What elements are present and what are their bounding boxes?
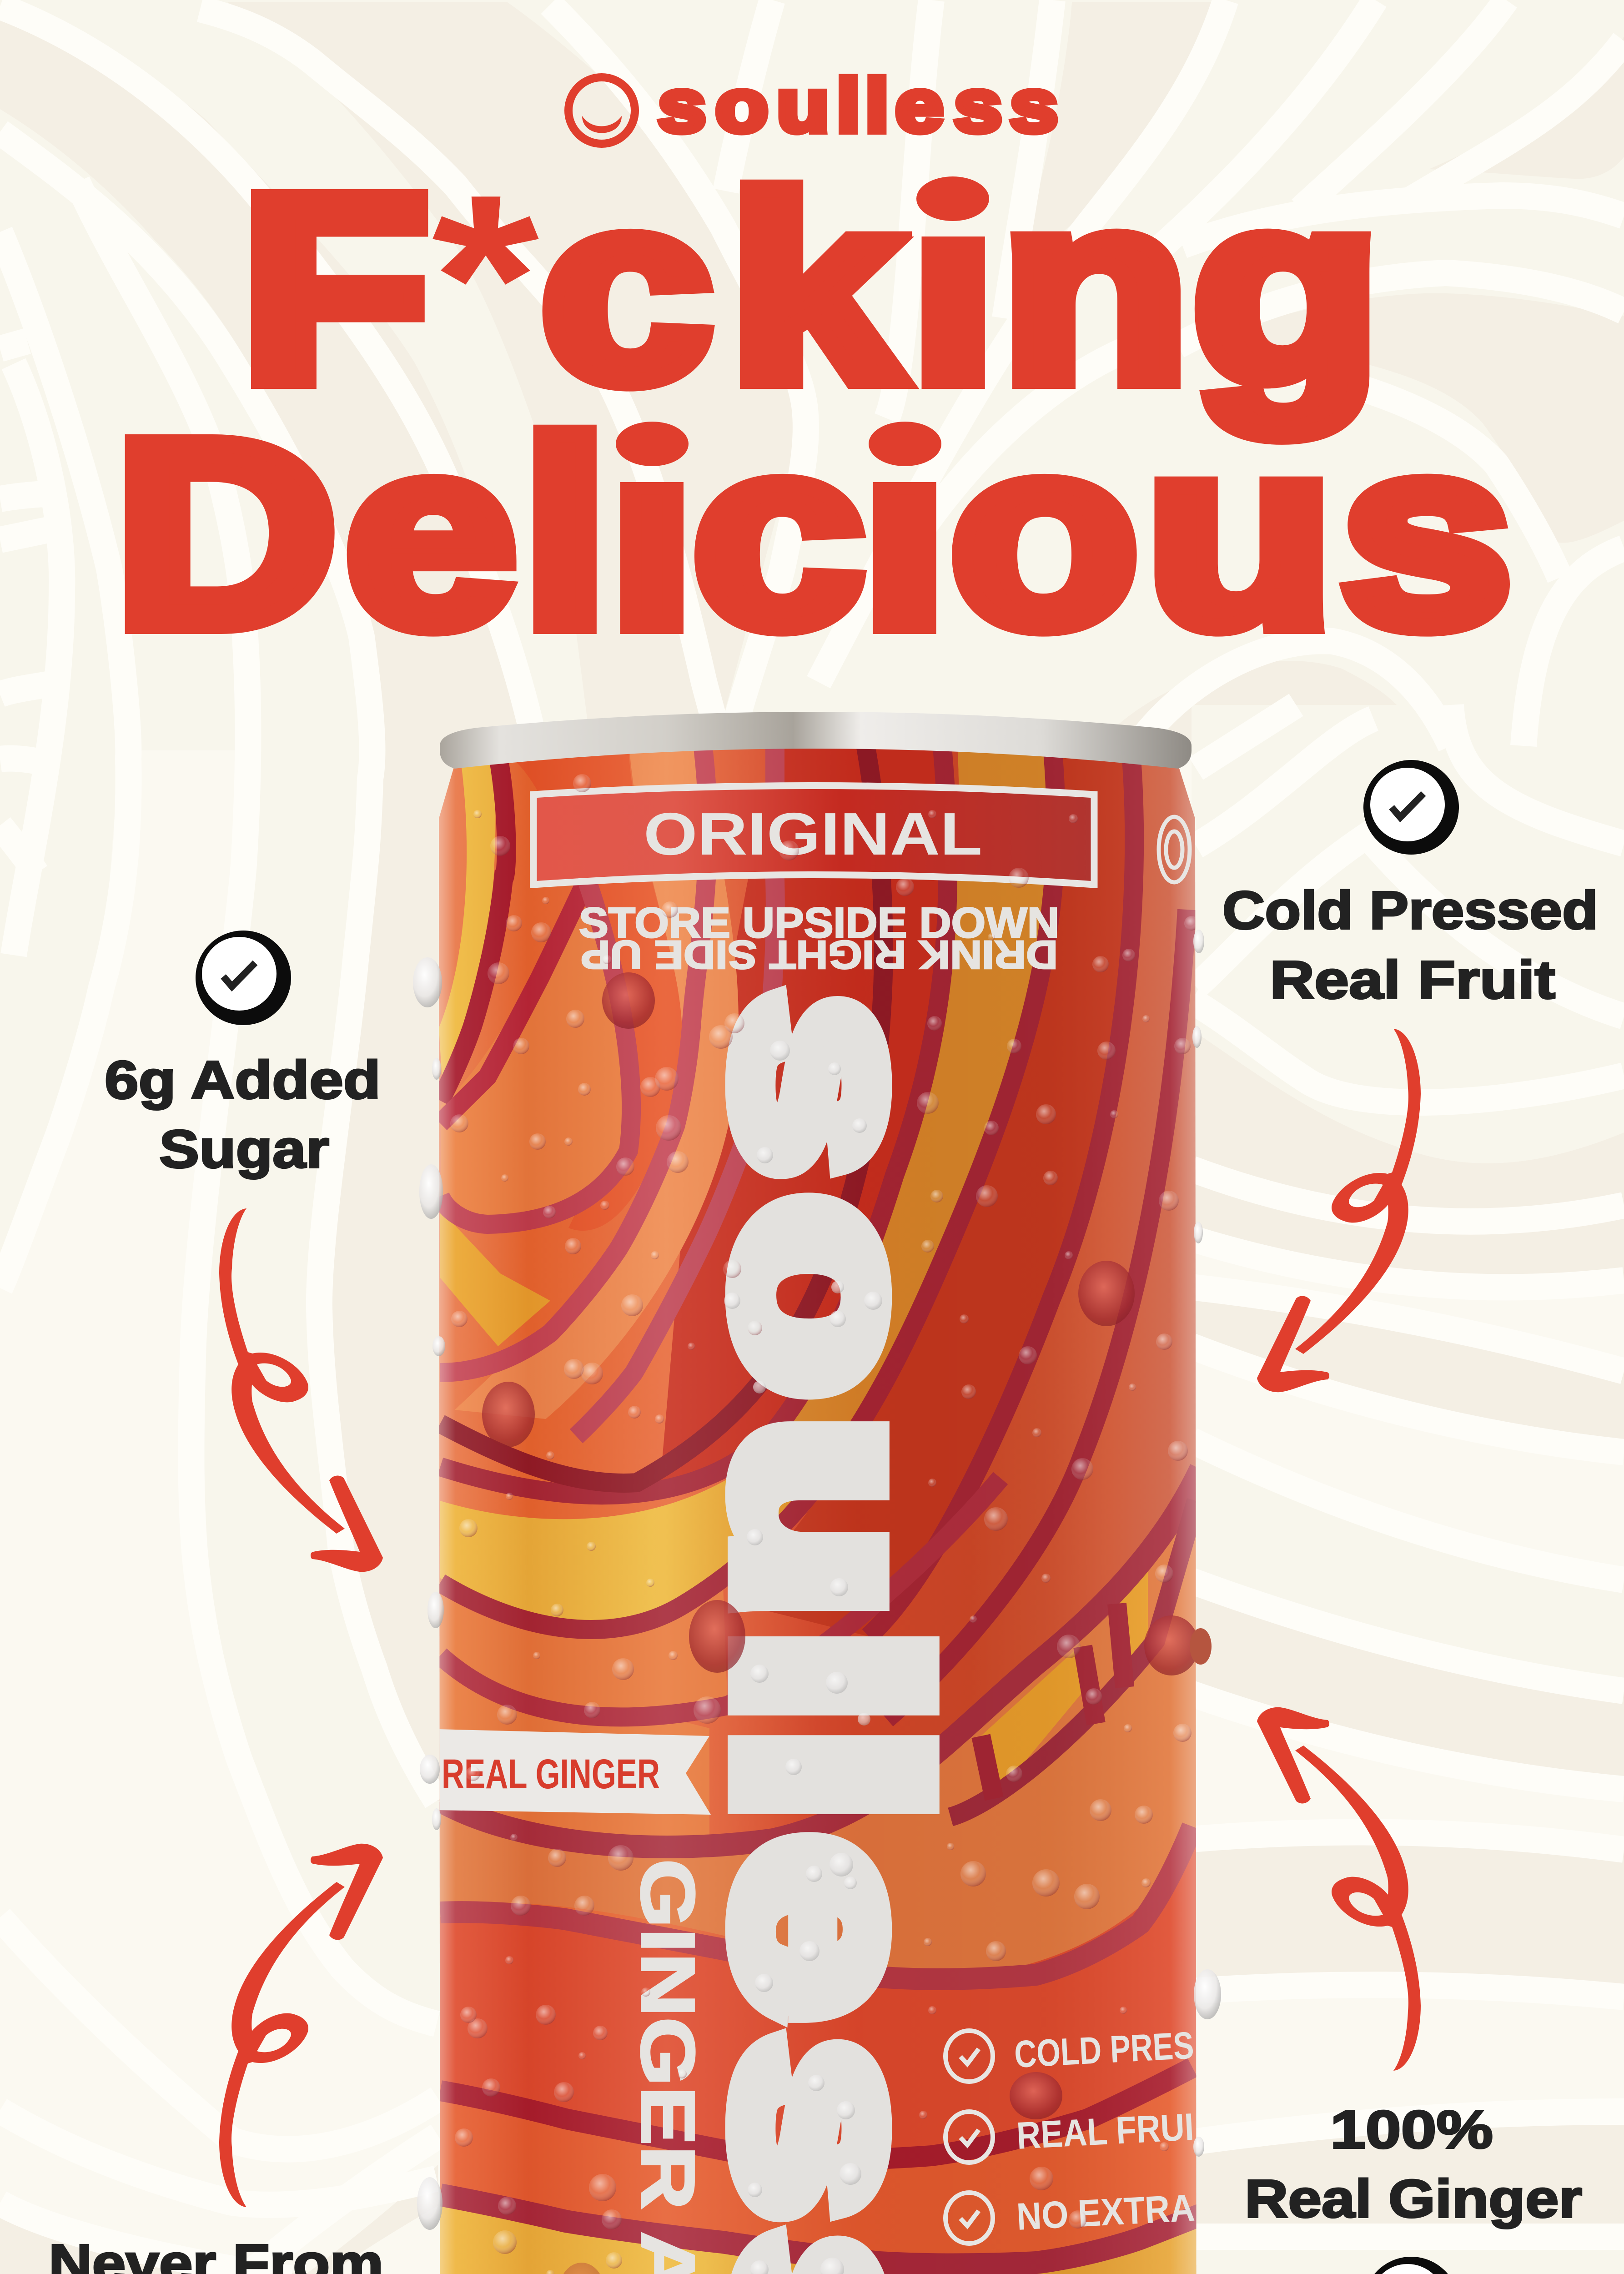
can checklist	[945, 2023, 1196, 2244]
logo: soulless wordmark	[568, 64, 1058, 147]
logo: smiley circle	[568, 77, 635, 144]
fruit-tinted clusters on can	[482, 972, 1199, 2274]
can checklist: NO EXTRA	[1016, 2186, 1196, 2238]
droplets on wordmark	[724, 1041, 897, 2274]
drink right side up note: DRINK RIGHT SIDE UP	[581, 932, 1058, 977]
arrow	[1257, 1707, 1421, 2071]
can top rim	[440, 712, 1192, 769]
can swirl stripes	[440, 737, 1201, 2274]
logo: wordmark text: soulless	[658, 64, 1058, 147]
can checklist: COLD PRES	[1013, 2023, 1195, 2076]
condensation droplets	[450, 774, 1199, 2274]
icon: check badge	[1363, 2257, 1459, 2274]
icon: check badge	[196, 931, 291, 1025]
can edge droplets	[413, 930, 1221, 2274]
spiral icon on can	[1159, 817, 1190, 882]
headline line one	[251, 176, 1371, 445]
callout: cold pressed real fruit: Real Fruit	[1270, 950, 1555, 1010]
callout text: Cold Pressed	[1222, 880, 1598, 941]
fine condensation droplets	[473, 810, 1169, 2274]
can checklist: REAL FRUI	[1016, 2105, 1195, 2157]
callout: 100% real ginger	[1245, 1707, 1582, 2274]
can body artwork	[437, 728, 1201, 2274]
real ginger ribbon: REAL GINGER	[442, 1751, 660, 1797]
callout text: 100%	[1330, 2100, 1493, 2160]
headline line two: Delicious	[115, 387, 1512, 681]
headline line one: *	[432, 145, 539, 410]
callout: cold pressed real fruit	[1222, 760, 1598, 1392]
callout text: 6g Added	[105, 1050, 381, 1110]
headline	[125, 176, 1510, 637]
icon: check badge	[1363, 760, 1459, 855]
headline line one: F	[241, 141, 429, 436]
top ORIGINAL label box: ORIGINAL	[644, 800, 982, 867]
callout: 6g added sugar: Sugar	[159, 1119, 329, 1179]
product can	[413, 712, 1221, 2274]
arrow	[219, 1208, 383, 1572]
headline line one: cking	[541, 141, 1380, 438]
top ORIGINAL label box	[533, 786, 1094, 885]
arrow	[1257, 1029, 1421, 1392]
store upside down note: STORE UPSIDE DOWN	[579, 899, 1059, 946]
callout: never from concentrate	[42, 1844, 389, 2274]
arrow	[219, 1844, 383, 2207]
callout: 6g added sugar	[105, 931, 383, 1572]
callout: 100% real ginger: Real Ginger	[1245, 2169, 1582, 2229]
real ginger ribbon	[437, 1729, 711, 1815]
